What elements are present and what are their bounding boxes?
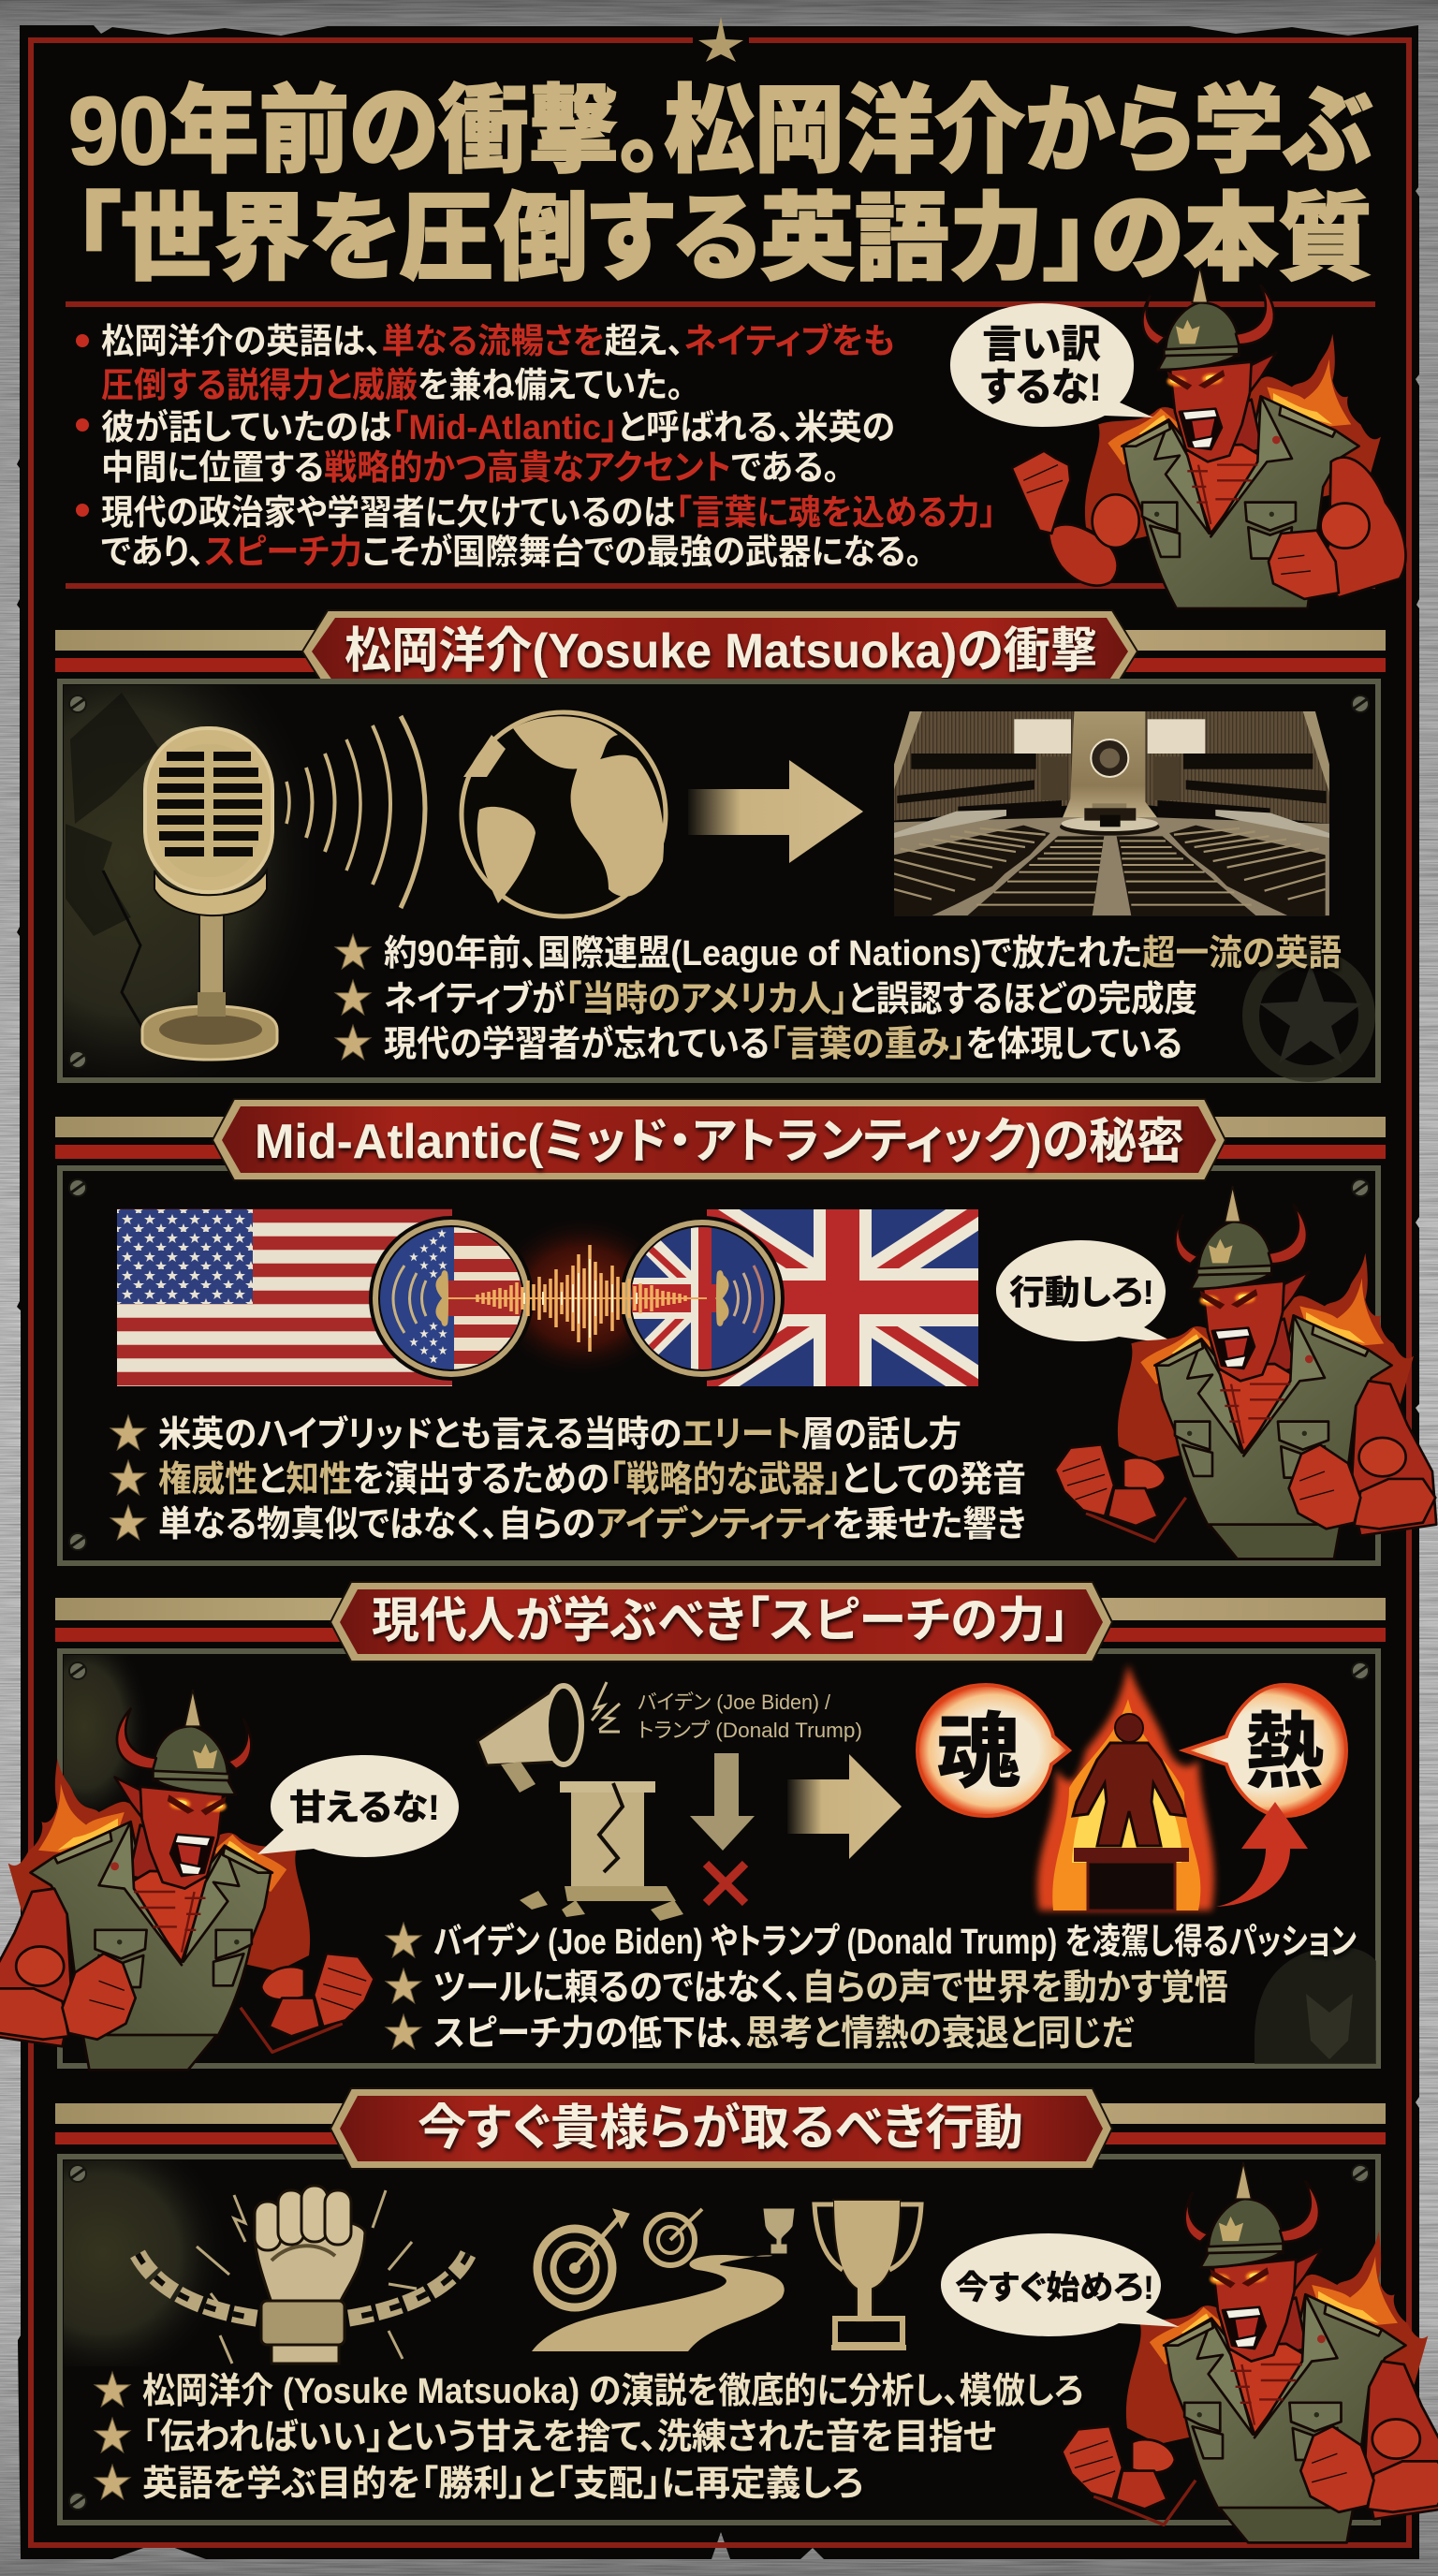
panel 1 (60, 681, 1378, 1080)
image: assembly hall (894, 711, 1329, 915)
panel 3 (60, 1651, 1378, 2066)
speech bubble: 今すぐ始めろ: 今すぐ始めろ! (955, 2270, 1154, 2306)
bubble: 熱 (1184, 1685, 1346, 1816)
icon: globe (462, 712, 666, 916)
bullets (386, 1922, 1357, 2054)
icon: microphone (142, 728, 277, 1060)
demon character 3 (0, 1690, 374, 2070)
medallion: UK (620, 1216, 786, 1381)
speech bubble: 行動しろ (996, 1240, 1180, 1345)
section 3 banner: 現代人が学ぶべき「スピーチの力」 (372, 1594, 1069, 1648)
section 4 banner (55, 2088, 1386, 2169)
title: 90年前の衝撃。松岡洋介から学ぶ (68, 78, 1372, 184)
bullets: 「伝わればいい」という甘えを捨て、洗練された音を目指せ (142, 2418, 996, 2457)
speech bubble: 行動しろ: 行動しろ! (1009, 1273, 1154, 1311)
glow behind waveform (489, 1214, 676, 1379)
demon character 2 (1055, 1186, 1436, 1559)
emblem watermark (1255, 1947, 1376, 2064)
intro bullets: 中間に位置する戦略的かつ高貴なアクセントである。 (101, 448, 840, 487)
flag: UK (707, 1209, 978, 1386)
bubble: 熱: 熱 (1245, 1705, 1324, 1798)
speech bubble: 言い訳するな: するな! (980, 365, 1102, 409)
intro bullets: 彼が話していたのは「Mid-Atlantic」と呼ばれる、米英の (101, 408, 895, 446)
icon: flaming orator (1037, 1664, 1214, 1910)
bullets (110, 1414, 1026, 1544)
medallion: USA (369, 1216, 538, 1381)
label: politicians (638, 1690, 862, 1742)
arrow: rising red (1216, 1802, 1308, 1907)
speech bubble: 言い訳するな: 言い訳 (982, 322, 1101, 366)
panel 4 (60, 2157, 1378, 2523)
bullets: ネイティブが「当時のアメリカ人」と誤認するほどの完成度 (384, 979, 1197, 1019)
top star ornament (693, 17, 749, 62)
flag: USA (117, 1209, 452, 1386)
bullets: ツールに頼るのではなく、自らの声で世界を動かす覚悟 (433, 1969, 1228, 2008)
section 3 banner (55, 1582, 1386, 1661)
waveform (448, 1245, 707, 1352)
intro bullets (76, 321, 996, 571)
bullets: 松岡洋介 (Yosuke Matsuoka) の演説を徹底的に分析し、模倣しろ (142, 2372, 1083, 2411)
bullets: 権威性と知性を演出するための「戦略的な武器」としての発音 (158, 1460, 1026, 1500)
demon character 4 (1062, 2162, 1438, 2542)
intro bullets: 松岡洋介の英語は、単なる流暢さを超え、ネイティブをも (101, 321, 895, 360)
bubble: 魂 (917, 1685, 1069, 1816)
title (68, 78, 1372, 292)
panel 2 (60, 1168, 1378, 1563)
icon: sound waves (286, 716, 425, 908)
bullets: 英語を学ぶ目的を「勝利」と「支配」に再定義しろ (142, 2465, 863, 2504)
intro bullets: であり、スピーチ力こそが国際舞台での最強の武器になる。 (101, 533, 922, 571)
speech bubble: 甘えるな: 甘えるな! (289, 1789, 440, 1828)
intro bullets: 圧倒する説得力と威厳を兼ね備えていた。 (101, 366, 683, 404)
icon: fist breaking chains (138, 2186, 468, 2364)
icon: large trophy (814, 2200, 921, 2350)
bullets (95, 2372, 1083, 2504)
bullets: 約90年前、国際連盟(League of Nations)で放たれた超一流の英語 (384, 934, 1342, 973)
title: 「世界を圧倒する英語力」の本質 (73, 185, 1372, 292)
bullets: スピーチ力の低下は、思考と情熱の衰退と同じだ (433, 2014, 1135, 2054)
bullets (335, 934, 1342, 1064)
label: politicians: トランプ (Donald Trump) (638, 1719, 862, 1742)
arrow: transform (787, 1754, 902, 1859)
label: politicians: バイデン (Joe Biden) / (638, 1690, 831, 1714)
divider top (66, 301, 1375, 307)
bullets: 現代の学習者が忘れている「言葉の重み」を体現している (384, 1025, 1182, 1064)
icon: red cross (706, 1864, 745, 1903)
section 4 banner: 今すぐ貴様らが取るべき行動 (418, 2101, 1023, 2156)
bullets: 単なる物真似ではなく、自らのアイデンティティを乗せた響き (158, 1504, 1026, 1544)
divider bottom (66, 583, 1375, 589)
speech bubble: 今すぐ始めろ (941, 2233, 1180, 2336)
arrow: to assembly (688, 760, 863, 863)
bubble: 魂: 魂 (936, 1705, 1020, 1798)
demon character 1 (1012, 267, 1405, 608)
section 1 banner: 松岡洋介(Yosuke Matsuoka)の衝撃 (345, 624, 1097, 679)
section 2 banner (55, 1099, 1386, 1180)
bullets: 米英のハイブリッドとも言える当時のエリート層の話し方 (158, 1414, 961, 1455)
emblem watermark (1251, 958, 1367, 1074)
icon: winding road (532, 2255, 785, 2351)
section 2 banner: Mid-Atlantic(ミッド・アトランティック)の秘密 (255, 1115, 1184, 1169)
speech bubble: 言い訳するな (950, 303, 1153, 427)
icon: targets (537, 2209, 702, 2307)
icon: broken megaphone podium (477, 1682, 683, 1921)
icon: small trophy (764, 2209, 794, 2253)
arrow: decline (690, 1753, 755, 1851)
intro bullets: 現代の政治家や学習者に欠けているのは「言葉に魂を込める力」 (101, 493, 996, 532)
speech bubble: 甘えるな (257, 1755, 459, 1857)
section 1 banner (55, 610, 1386, 692)
